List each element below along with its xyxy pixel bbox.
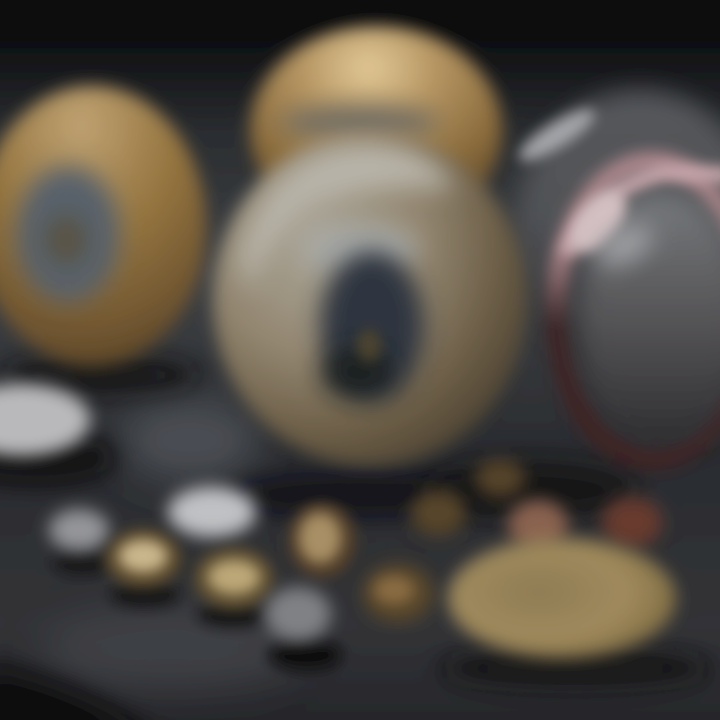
bronze coin 2 <box>410 490 466 536</box>
right egg with pink ring <box>556 162 720 458</box>
egg upper pale highlight <box>240 145 455 290</box>
bronze coin 3 <box>475 459 525 497</box>
pink coin <box>508 500 568 550</box>
silver coin 2 <box>168 487 256 537</box>
right silver egg <box>513 90 720 380</box>
rear centre gold egg <box>250 26 502 234</box>
small coins <box>49 459 662 670</box>
gold coin 3 <box>288 502 356 578</box>
centre large egg <box>213 134 527 466</box>
left gold egg <box>0 86 206 366</box>
silver egg highlight <box>513 102 601 168</box>
large gold coin <box>448 538 676 658</box>
gold coin 1 <box>105 529 181 607</box>
white dish at left <box>0 384 115 482</box>
silver coin 1 <box>49 509 110 574</box>
silver coin 3 <box>265 587 341 670</box>
egg pale emblem top <box>307 226 417 274</box>
left egg grey-blue emblem <box>16 166 120 302</box>
red coin <box>602 497 662 547</box>
bronze coin 1 <box>362 563 434 623</box>
egg blue dark emblem <box>320 251 424 399</box>
gold coin 2 <box>194 547 274 627</box>
